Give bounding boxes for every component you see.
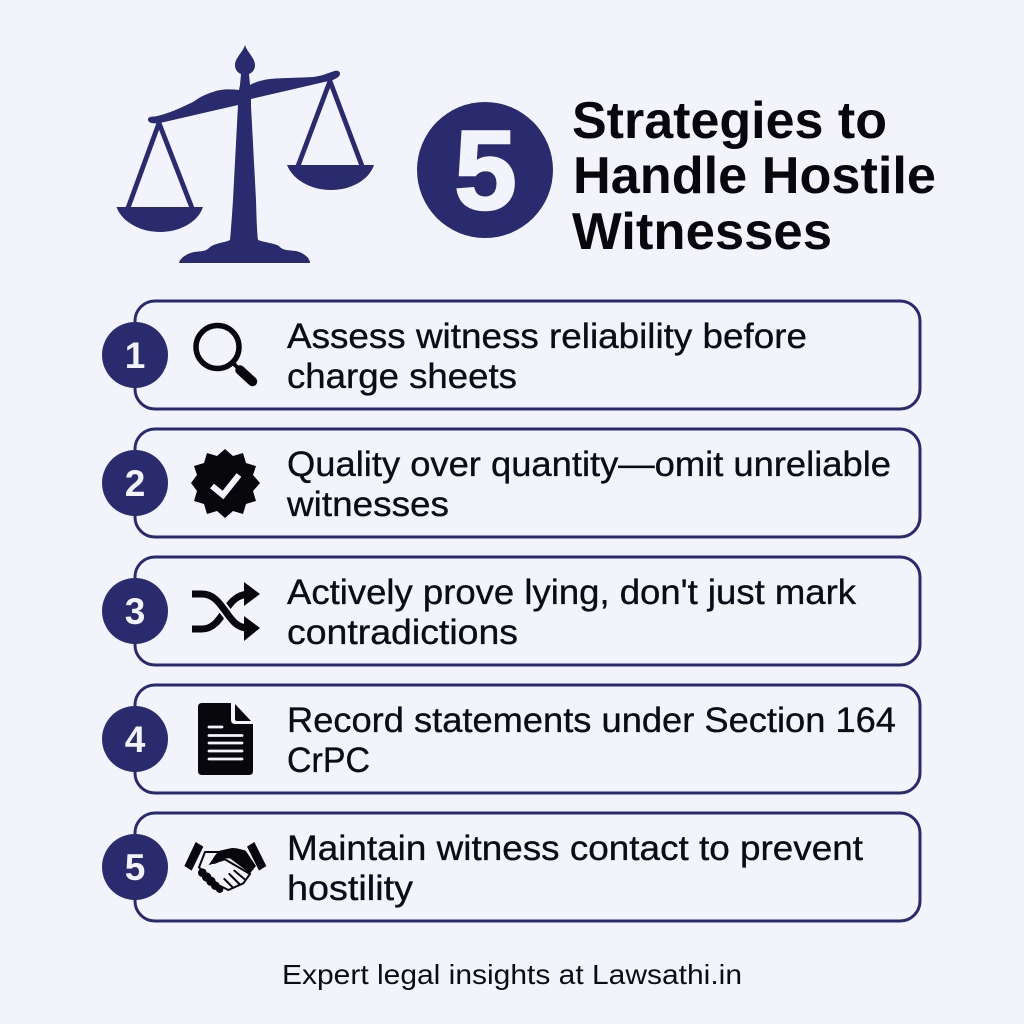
text: strategy 3: Actively prove lying, don't just mark (287, 573, 857, 612)
text: strategy 4 (287, 701, 896, 780)
text: strategy 2 (286, 445, 891, 524)
footer text: Expert legal insights at Lawsathi.in (282, 959, 742, 990)
title: Strategies to (572, 92, 887, 150)
title (572, 92, 936, 261)
text: strategy 3: contradictions (287, 613, 518, 652)
text: strategy 1: charge sheets (287, 357, 517, 396)
number badge 5 (102, 834, 168, 900)
icon: scales of justice (116, 45, 374, 263)
panel: strategy 2 (102, 429, 920, 537)
icon: handshake (184, 842, 266, 893)
text: strategy 5: hostility (287, 869, 414, 908)
icon: magnifying glass (196, 326, 252, 382)
number badge 2 (102, 450, 168, 516)
text: strategy 4: CrPC (287, 741, 370, 780)
badge: big number 5 (417, 102, 553, 238)
text: strategy 1: Assess witness reliability before (287, 317, 807, 356)
panel: strategy 5 (102, 813, 920, 921)
number badge 4: 4 (125, 719, 146, 760)
title: Witnesses (572, 203, 832, 261)
text: strategy 3 (287, 573, 857, 652)
icon: shuffle arrows (192, 582, 260, 641)
text: strategy 4: Record statements under Section 164 (287, 701, 896, 740)
number badge 3: 3 (125, 591, 145, 632)
number badge 1: 1 (125, 335, 145, 376)
icon: verified badge (191, 449, 260, 518)
text: strategy 2: Quality over quantity—omit unreliable (287, 445, 891, 484)
text: strategy 2: witnesses (286, 485, 449, 524)
number badge 4 (102, 706, 168, 772)
number badge 2: 2 (125, 463, 145, 504)
badge: big number 5: 5 (454, 108, 517, 233)
number badge 3 (102, 578, 168, 644)
text: strategy 1 (287, 317, 807, 396)
title: Handle Hostile (573, 147, 936, 205)
panel: strategy 1 (102, 301, 920, 409)
panel: strategy 3 (102, 557, 920, 665)
icon: document (198, 703, 253, 775)
number badge 5: 5 (125, 847, 145, 888)
text: strategy 5: Maintain witness contact to prevent (287, 829, 863, 868)
number badge 1 (102, 322, 168, 388)
text: strategy 5 (287, 829, 863, 908)
panel: strategy 4 (102, 685, 920, 793)
